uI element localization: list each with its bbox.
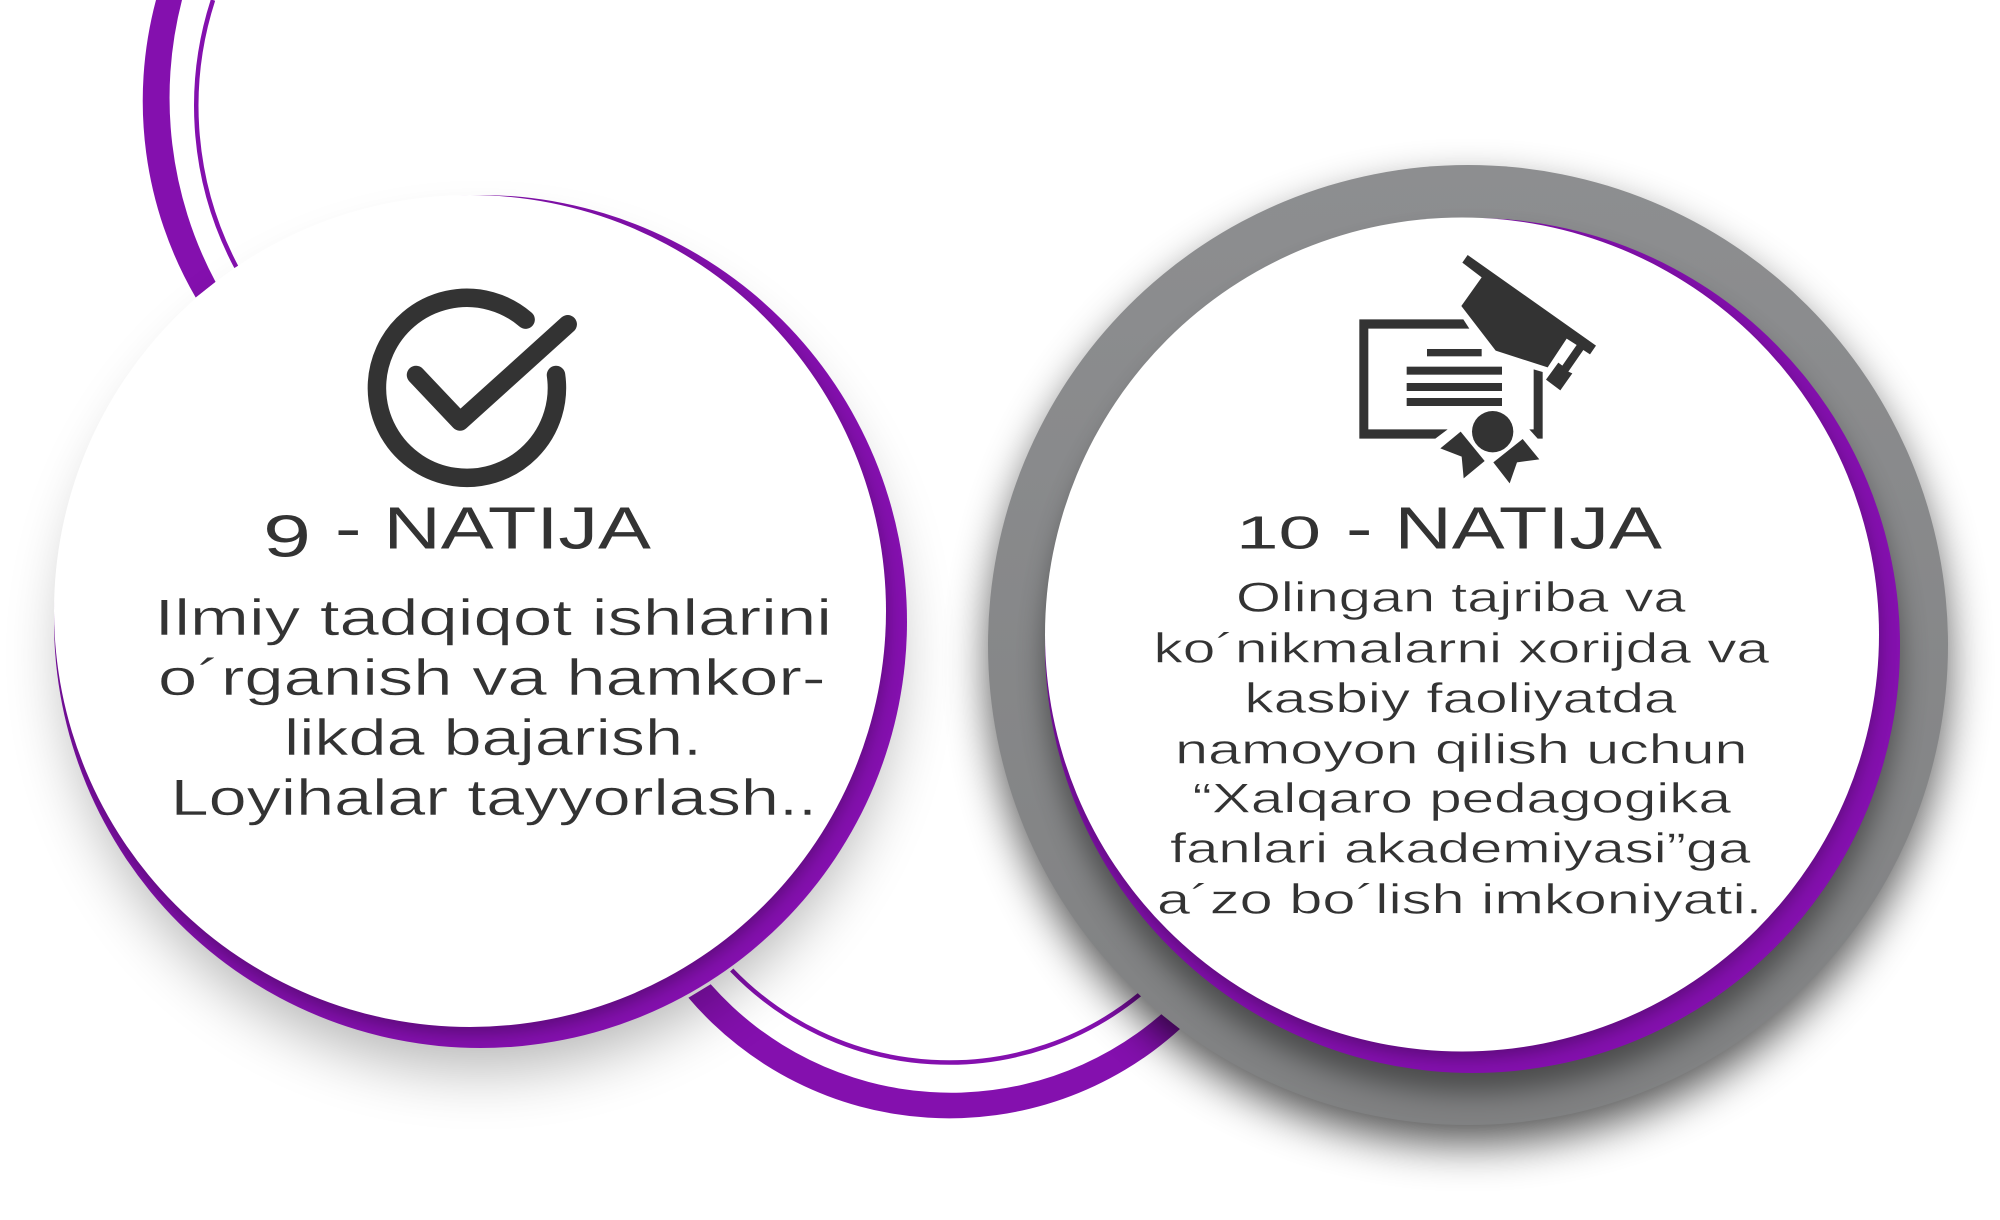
text block: result 10 description [1154, 574, 1770, 922]
right circle drop shadow [990, 187, 1946, 1143]
text block: result 10 description: a´zo bo´lish imkoniyati. [1157, 875, 1762, 922]
panel: result 10 [988, 165, 1948, 1143]
text block: result 9 description: Ilmiy tadqiqot ishlarini [154, 589, 832, 646]
right circle purple crescent [1045, 218, 1900, 1073]
heading: 10 - NATIJA: - NATIJA [1346, 495, 1663, 561]
text block: result 10 description: “Xalqaro pedagogika [1192, 775, 1732, 822]
text block: result 10 description: namoyon qilish uchun [1175, 725, 1748, 772]
text block: result 9 description: Loyihalar tayyorlash.. [171, 769, 817, 826]
right white disc [1045, 218, 1879, 1052]
bottom connector thin arc [732, 970, 1140, 1063]
icon: check mark in circle [377, 298, 568, 478]
heading: 9 - NATIJA: - NATIJA [335, 495, 652, 561]
left crescent inner shading [54, 202, 886, 1034]
left white disc [54, 195, 886, 1027]
panel: result 9 [54, 195, 907, 1070]
text block: result 9 description [154, 589, 832, 826]
text block: result 9 description: likda bajarish. [284, 709, 702, 766]
left circle drop shadow [66, 240, 896, 1070]
heading: 10 - NATIJA: 10 [1236, 506, 1321, 558]
heading: 9 - NATIJA [263, 495, 652, 570]
text block: result 10 description: Olingan tajriba va [1236, 574, 1687, 621]
top-left thick arc [143, 0, 216, 298]
text block: result 10 description: ko´nikmalarni xorijda va [1154, 624, 1770, 671]
text block: result 10 description: kasbiy faoliyatda [1244, 675, 1678, 722]
text block: result 9 description: o´rganish va hamkor- [158, 649, 826, 706]
right circle gray ring [988, 165, 1948, 1125]
text block: result 10 description: fanlari akademiyasi”ga [1170, 825, 1752, 872]
top-left thin arc [196, 0, 236, 267]
icon: diploma with graduation cap [1359, 255, 1596, 483]
left circle purple crescent [54, 195, 907, 1048]
heading: 10 - NATIJA [1236, 495, 1663, 561]
gray ring inner shading [1045, 238, 1900, 1092]
heading: 9 - NATIJA: 9 [263, 504, 311, 570]
bottom connector thick arc [688, 984, 1180, 1118]
right crescent inner shading [1045, 224, 1879, 1058]
